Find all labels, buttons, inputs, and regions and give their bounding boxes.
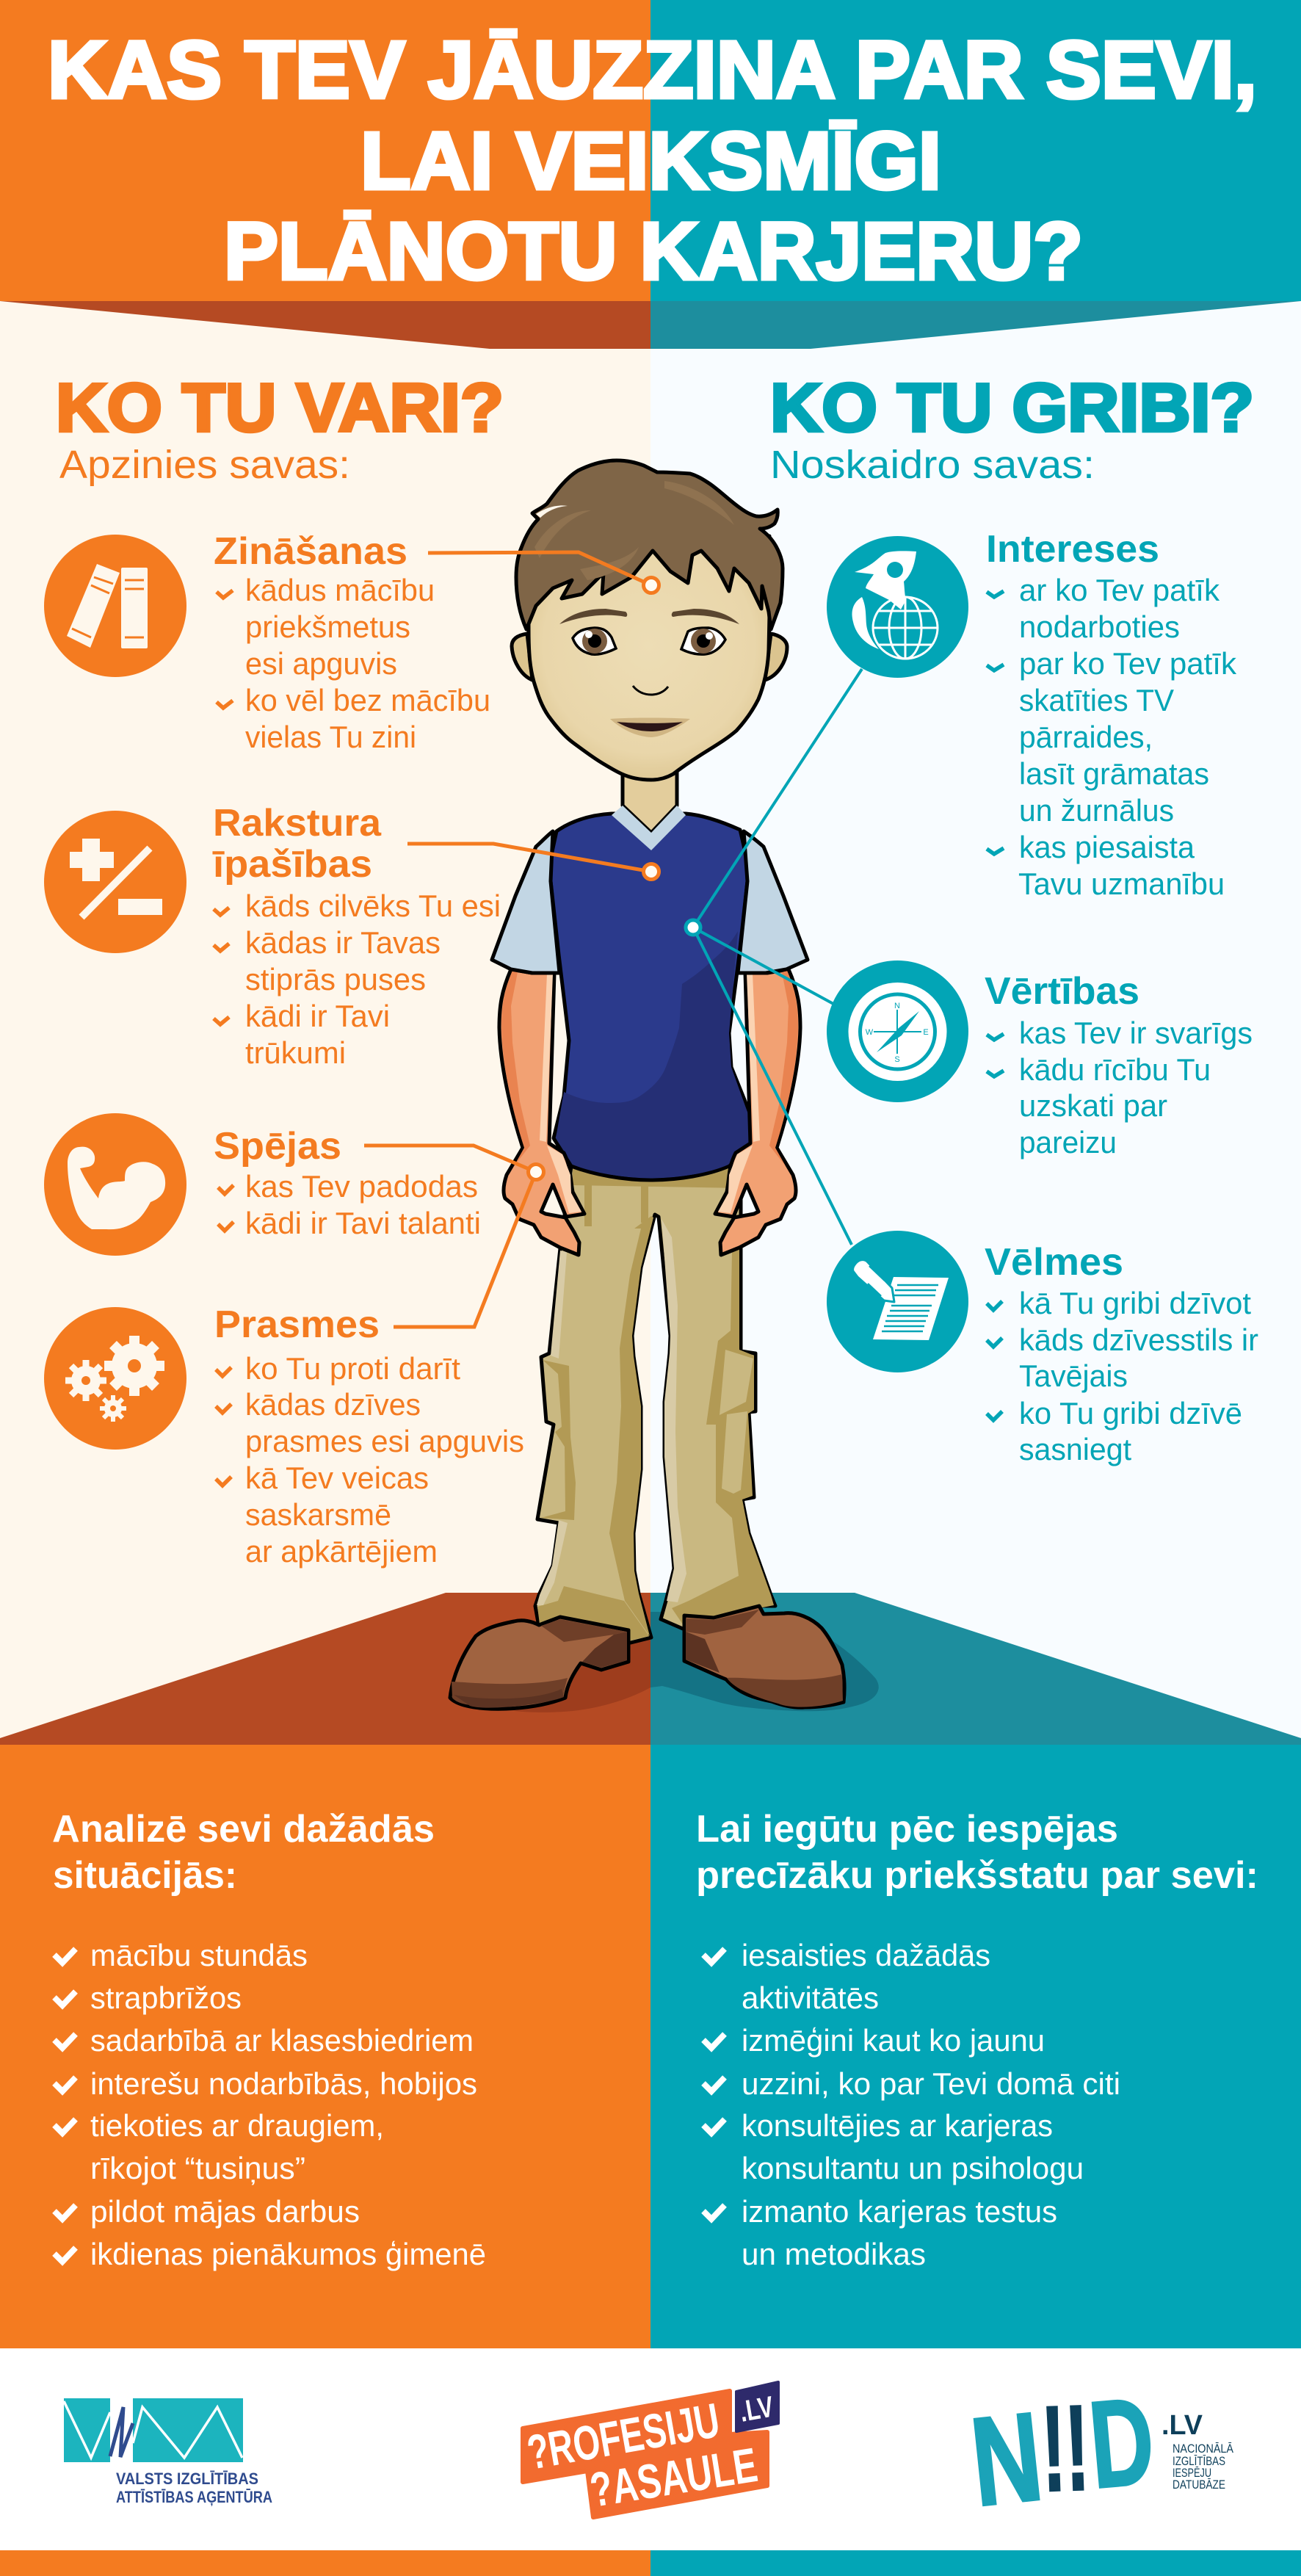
ears	[512, 634, 787, 680]
panel: Intereses	[827, 528, 1237, 901]
sleeves	[492, 831, 808, 973]
list: Intereses: ar ko Tev patīk	[1019, 573, 1220, 607]
heading: Ko tu vari	[56, 369, 504, 487]
left shoe	[450, 1617, 628, 1709]
list: Intereses: un žurnālus	[1019, 793, 1174, 828]
list: Vērtības: kādu rīcību Tu	[1019, 1052, 1211, 1087]
icon: pen and paper	[827, 1231, 968, 1372]
list: Rakstura īpašības: stiprās puses	[245, 962, 426, 996]
heading: Ko tu gribi: Noskaidro savas:	[770, 443, 1095, 487]
icon: plus minus	[44, 811, 186, 953]
list: Intereses: kas piesaista	[1019, 830, 1195, 864]
logo: Profesiju pasaule	[523, 2382, 778, 2517]
heading: Ko tu gribi: KO TU GRIBI?	[770, 369, 1254, 446]
panel: Vēlmes: Vēlmes	[985, 1241, 1123, 1284]
list: Vēlmes: kā Tu gribi dzīvot	[1019, 1286, 1251, 1320]
list: Vēlmes: sasniegt	[1019, 1432, 1131, 1466]
neck	[623, 764, 677, 833]
list: Zināšanas: ko vēl bez mācību	[245, 683, 490, 717]
panel: Rakstura īpašības: Rakstura	[213, 802, 382, 844]
list: Intereses: lasīt grāmatas	[1019, 756, 1209, 791]
list: Rakstura īpašības	[214, 889, 501, 1070]
heading: accurate picture: Lai iegūtu pēc iespējas	[696, 1808, 1118, 1850]
character figure	[450, 460, 844, 1709]
list: situations: interešu nodarbībās, hobijos	[90, 2066, 477, 2101]
collar	[612, 806, 686, 850]
list: Prasmes: kā Tev veicas	[245, 1461, 429, 1495]
list: Prasmes: kādas dzīves	[245, 1387, 421, 1422]
panel: Spējas	[44, 1113, 481, 1256]
heading: analyse yourself: Analizē sevi dažādās	[52, 1808, 435, 1850]
footer white band	[0, 2348, 1301, 2550]
list: Intereses	[987, 573, 1237, 901]
list: situations: ikdienas pienākumos ģimenē	[90, 2237, 486, 2271]
logo: NIID: IZGLĪTĪBAS	[1173, 2454, 1225, 2468]
list: Rakstura īpašības: kādas ir Tavas	[245, 925, 441, 960]
vest	[551, 814, 751, 1180]
panel: Zināšanas	[44, 530, 490, 754]
list: actions: izmanto karjeras testus	[742, 2194, 1057, 2229]
list: situations: rīkojot “tusiņus”	[90, 2151, 305, 2185]
list: Zināšanas: kādus mācību	[245, 573, 435, 607]
list: Rakstura īpašības: kādi ir Tavi	[245, 999, 390, 1033]
nose	[633, 686, 668, 695]
logo: Profesiju pasaule: .LV	[737, 2391, 776, 2428]
list: Vērtības	[987, 1016, 1253, 1159]
icon: compass	[827, 960, 968, 1102]
logo: NIID: .LV	[1162, 2410, 1203, 2441]
list: Vēlmes	[987, 1286, 1258, 1466]
list: Intereses: nodarboties	[1019, 609, 1180, 644]
panel: analyse yourself	[0, 1745, 650, 2348]
right shoe	[684, 1606, 844, 1707]
logo: VIAA: VALSTS IZGLĪTĪBAS	[116, 2470, 258, 2488]
list: actions: iesaisties dažādās	[742, 1938, 990, 1972]
logo: NIID: !!	[1040, 2380, 1091, 2517]
list: actions	[703, 1938, 1120, 2271]
list: Zināšanas	[217, 573, 490, 754]
right eye	[681, 628, 725, 654]
footer bottom stripe	[0, 2550, 1301, 2576]
list: Zināšanas: esi apguvis	[245, 646, 397, 681]
list: Vērtības: pareizu	[1019, 1125, 1117, 1159]
list: Prasmes: ar apkārtējiem	[245, 1534, 438, 1569]
list: Spējas: kādi ir Tavi talanti	[245, 1206, 481, 1240]
list: Vērtības: uzskati par	[1019, 1088, 1167, 1123]
list: situations: pildot mājas darbus	[90, 2194, 360, 2229]
list: situations: mācību stundās	[90, 1938, 308, 1972]
title: PLĀNOTU KARJERU?	[224, 206, 1083, 297]
logo: NIID: DATUBĀZE	[1173, 2478, 1225, 2492]
left eye	[573, 628, 616, 654]
heading: Ko tu vari: Apzinies savas:	[59, 443, 350, 487]
panel: Rakstura īpašības	[44, 802, 501, 1070]
list: situations	[54, 1938, 486, 2271]
icon: books	[44, 535, 186, 677]
list: situations: tiekoties ar draugiem,	[90, 2108, 384, 2143]
list: situations: strapbrīžos	[90, 1980, 242, 2015]
eyebrows	[559, 609, 739, 624]
panel: Prasmes	[44, 1303, 524, 1569]
right arm and hand	[715, 969, 800, 1255]
icon: compass: E	[923, 1028, 929, 1037]
list: actions: aktivitātēs	[742, 1980, 879, 2015]
icon: compass: N	[894, 1002, 900, 1010]
panel: Prasmes: Prasmes	[214, 1303, 380, 1346]
logo: Profesiju pasaule: ?ROFESIJU	[523, 2392, 723, 2480]
panel: Intereses: Intereses	[986, 528, 1159, 571]
list: Rakstura īpašības: kāds cilvēks Tu esi	[245, 889, 501, 923]
panel: Vērtības	[827, 960, 1253, 1159]
list: Rakstura īpašības: trūkumi	[245, 1035, 346, 1070]
callout lines and dot: wishes	[686, 669, 862, 1245]
list: actions: konsultējies ar karjeras	[742, 2108, 1053, 2143]
icon: flexed arm	[44, 1113, 186, 1256]
icon: compass: S	[894, 1055, 900, 1064]
title: KAS TEV JĀUZZINA PAR SEVI,	[48, 25, 1257, 115]
list: Zināšanas: vielas Tu zini	[245, 720, 416, 754]
list: Vērtības: kas Tev ir svarīgs	[1019, 1016, 1253, 1050]
list: Zināšanas: priekšmetus	[245, 609, 410, 644]
panel: Zināšanas: Zināšanas	[214, 530, 407, 573]
face	[529, 536, 769, 780]
logo: NIID	[965, 2371, 1234, 2533]
list: Intereses: Tavu uzmanību	[1018, 866, 1225, 901]
logo: VIAA	[64, 2398, 272, 2506]
heading: Ko tu gribi	[770, 369, 1254, 487]
logo: VIAA: ATTĪSTĪBAS AĢENTŪRA	[116, 2488, 272, 2506]
heading: accurate picture: precīzāku priekšstatu par sevi:	[696, 1854, 1258, 1897]
list: actions: uzzini, ko par Tevi domā citi	[742, 2066, 1120, 2101]
panel: Vērtības: Vērtības	[985, 970, 1139, 1013]
list: Prasmes: prasmes esi apguvis	[245, 1424, 524, 1458]
list: actions: un metodikas	[742, 2237, 926, 2271]
list: Spējas: kas Tev padodas	[245, 1169, 478, 1204]
icon: compass: W	[866, 1028, 874, 1037]
heading: Ko tu vari: KO TU VARI?	[56, 369, 504, 446]
list: Vēlmes: ko Tu gribi dzīvē	[1019, 1396, 1242, 1430]
left arm and hand	[499, 969, 584, 1255]
list: Vēlmes: Tavējais	[1019, 1358, 1128, 1393]
panel: Rakstura īpašības: īpašības	[212, 843, 372, 886]
list: Intereses: pārraides,	[1019, 720, 1153, 754]
list: Vēlmes: kāds dzīvesstils ir	[1019, 1323, 1258, 1357]
panel: get an accurate picture	[650, 1745, 1301, 2348]
icon: gears	[44, 1307, 186, 1450]
list: Spējas	[218, 1169, 481, 1240]
logo: NIID: NACIONĀLĀ	[1173, 2442, 1234, 2456]
logo: NIID: D	[1084, 2371, 1159, 2514]
title: LAI VEIKSMĪGI	[360, 116, 941, 206]
list: Intereses: skatīties TV	[1019, 683, 1174, 717]
heading: accurate picture	[696, 1808, 1258, 1897]
logo: NIID: IESPĒJU	[1173, 2466, 1211, 2480]
heading: analyse yourself	[52, 1808, 435, 1897]
header band with title	[0, 0, 1301, 349]
list: Prasmes: saskarsmē	[245, 1497, 391, 1532]
list: actions: konsultantu un psihologu	[742, 2151, 1084, 2185]
list: Prasmes	[216, 1351, 524, 1569]
background: left cream panel	[0, 0, 650, 2576]
panel: Spējas: Spējas	[214, 1125, 341, 1168]
list: Prasmes: ko Tu proti darīt	[245, 1351, 460, 1386]
logo: Profesiju pasaule: ?ASAULE	[587, 2437, 761, 2517]
floor trapezoid	[0, 1593, 1301, 1745]
callout lines and dots: abilities	[364, 552, 659, 1327]
logo: NIID: N	[965, 2387, 1048, 2533]
list: Intereses: par ko Tev patīk	[1019, 646, 1237, 681]
background: right pale panel	[650, 0, 1301, 2576]
heading: analyse yourself: situācijās:	[53, 1854, 237, 1897]
panel: Vēlmes	[827, 1231, 1258, 1466]
hair	[516, 460, 783, 629]
title	[48, 25, 1257, 297]
trousers	[535, 1166, 775, 1643]
list: situations: sadarbībā ar klasesbiedriem	[90, 2023, 474, 2058]
mouth	[610, 718, 690, 737]
list: actions: izmēģini kaut ko jaunu	[742, 2023, 1045, 2058]
icon: rocket and globe	[827, 536, 968, 678]
